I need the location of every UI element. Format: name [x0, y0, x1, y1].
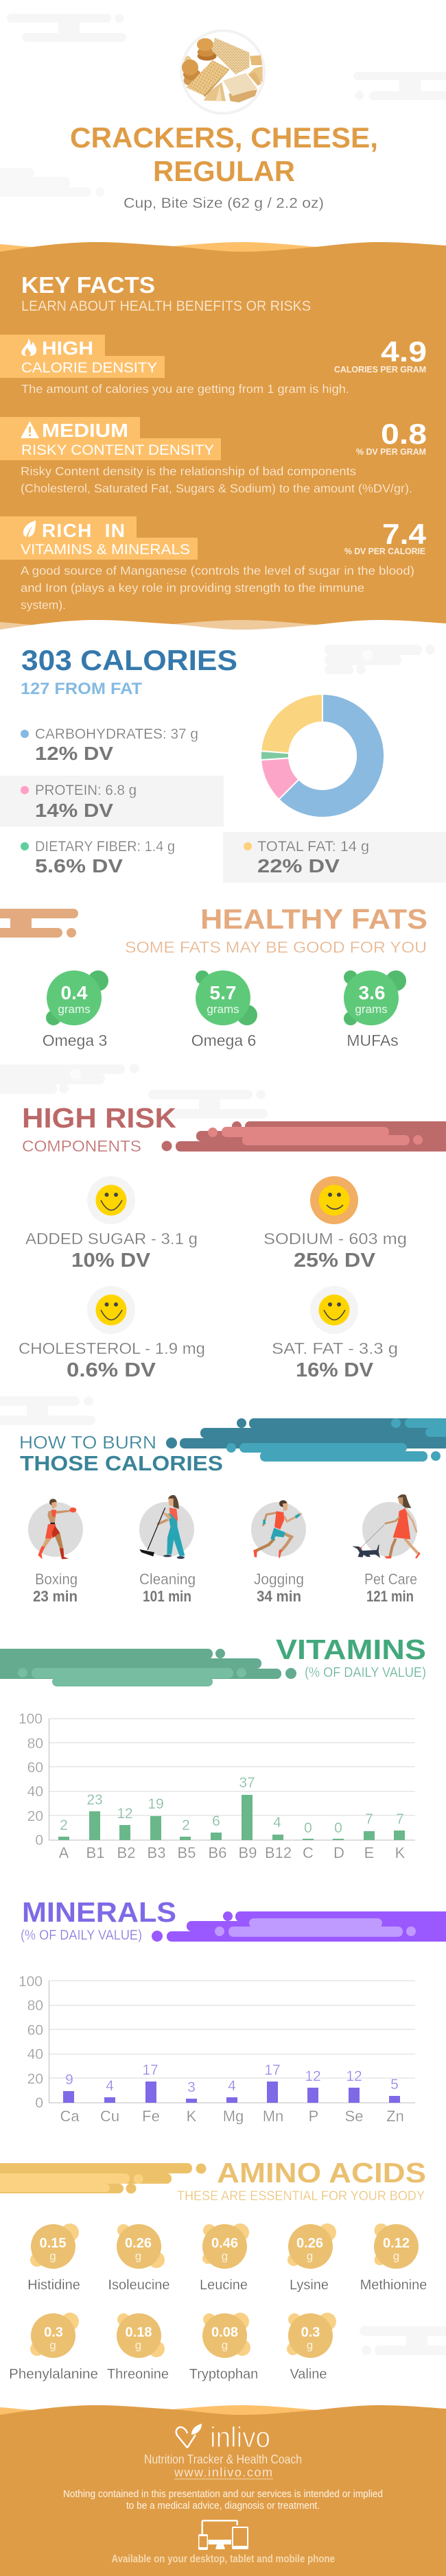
panel: how to burn those calories [19, 1418, 446, 1605]
bar chart: vitamins: 60 [27, 1760, 43, 1776]
amino: lysine: g [307, 2250, 313, 2263]
amino: threonine [107, 2313, 169, 2382]
icon: warning triangle [21, 421, 39, 438]
icon: woman walking dog [352, 1494, 421, 1558]
amino: lysine: Lysine [290, 2278, 329, 2293]
fact: medium risky content density: % DV PER GRAM [356, 446, 426, 457]
disclaimer: to be a medical advice, diagnosis or treatment. [126, 2500, 320, 2512]
minerals heading: (% OF DAILY VALUE) [21, 1928, 142, 1943]
background cloud: how to burn [0, 1396, 95, 1425]
bar chart: minerals: Zn [386, 2108, 404, 2125]
stat: omega 3: 0.4 [61, 982, 88, 1003]
burn heading: HOW TO BURN [19, 1432, 156, 1453]
icon: flame [21, 338, 36, 356]
burn heading: THOSE CALORIES [20, 1451, 223, 1475]
bar chart: vitamins: B9 [239, 1844, 257, 1861]
amino: histidine [27, 2223, 80, 2293]
activity: pet care: 121 min [366, 1588, 414, 1605]
amino: threonine: 0.18 [126, 2325, 152, 2340]
bar chart: vitamins: B12 [265, 1844, 292, 1861]
bar chart: minerals: 3 [187, 2079, 196, 2095]
amino: methionine [360, 2223, 427, 2293]
fact: rich in vitamins and minerals: RICH IN [42, 520, 125, 541]
bar chart: minerals: K [187, 2108, 197, 2125]
bar chart: vitamins: 0 [304, 1820, 312, 1836]
background cloud: top left [7, 14, 126, 42]
fact: medium risky content density: Risky Content density is the relationship of bad components [21, 464, 356, 478]
bar chart: vitamins: 2 [60, 1817, 68, 1833]
stat: omega 6: Omega 6 [191, 1031, 256, 1049]
amino: histidine: g [49, 2250, 56, 2263]
key facts heading: KEY FACTS [21, 272, 155, 298]
activity: jogging [251, 1500, 306, 1605]
bar chart: vitamins: 2 [182, 1817, 190, 1833]
fact: medium risky content density: (Cholesterol, Saturated Fat, Sugars & Sodium) to the amount (%DV/gr). [21, 481, 412, 495]
amino: lysine [287, 2223, 336, 2293]
fact: high calorie density [0, 335, 427, 396]
amino: lysine: 0.26 [296, 2236, 323, 2251]
fact: high calorie density: The amount of calories you are getting from 1 gram is high. [21, 382, 349, 396]
panel: key facts [0, 242, 446, 639]
bar chart: vitamins: 4 [273, 1815, 281, 1830]
background cloud: calories [325, 645, 435, 674]
healthy fats heading: SOME FATS MAY BE GOOD FOR YOU [125, 938, 427, 956]
activity: jogging: 34 min [257, 1588, 301, 1605]
legend: dietary fiber: 5.6% DV [35, 855, 123, 876]
bar chart: minerals: 12 [305, 2068, 321, 2084]
bar chart: vitamins: C [303, 1844, 314, 1861]
vitamins heading: VITAMINS [276, 1634, 426, 1665]
activity: cleaning: 101 min [143, 1588, 191, 1605]
bar chart: vitamins: 37 [239, 1775, 255, 1791]
bar chart: minerals: Mg [223, 2108, 244, 2125]
amino: methionine: 0.12 [383, 2236, 410, 2251]
amino: isoleucine: g [135, 2250, 141, 2263]
icon: person sweeping [139, 1495, 185, 1559]
bar chart: minerals: 4 [228, 2078, 236, 2094]
bar chart: minerals: Fe [142, 2108, 160, 2125]
stat: omega 3 [43, 970, 108, 1049]
background cloud: lower right [360, 2326, 446, 2355]
legend: protein [0, 776, 224, 826]
amino: leucine: 0.46 [211, 2236, 238, 2251]
bar chart: vitamins: 7 [365, 1811, 373, 1827]
panel: footer [0, 2405, 446, 2576]
stat: mufas: MUFAs [347, 1031, 399, 1049]
legend: protein: PROTEIN: 6.8 g [35, 783, 137, 798]
bar chart: minerals: 100 [19, 1974, 43, 1990]
bar chart: minerals: 40 [27, 2047, 43, 2062]
panel: high risk components [19, 1102, 446, 1381]
burn heading [19, 1432, 223, 1475]
fact: rich in vitamins and minerals [0, 516, 427, 612]
fact: rich in vitamins and minerals: and Iron (plays a key role in providing strength to the immune [21, 581, 364, 595]
bar chart: vitamins: D [333, 1844, 344, 1861]
fact: rich in vitamins and minerals: system). [21, 598, 66, 612]
bar chart: vitamins: 0 [35, 1833, 43, 1848]
amino: tryptophan: g [222, 2339, 228, 2352]
background cloud: centre of high risk [148, 1090, 268, 1119]
minerals heading: MINERALS [22, 1896, 176, 1928]
bar chart: minerals: Mn [263, 2108, 283, 2125]
icon: crackers photo in circle [182, 31, 264, 113]
stat: omega 6 [191, 970, 257, 1049]
vitamins heading: (% OF DAILY VALUE) [305, 1665, 426, 1680]
amino: threonine: g [135, 2339, 141, 2352]
fact: high calorie density: HIGH [42, 337, 93, 359]
icon: jogger [253, 1500, 301, 1558]
fact: rich in vitamins and minerals: VITAMINS & MINERALS [21, 542, 190, 558]
amino acids heading [177, 2157, 426, 2204]
component: saturated fat [272, 1286, 398, 1381]
amino: methionine: g [393, 2250, 399, 2263]
amino: isoleucine: Isoleucine [108, 2278, 170, 2293]
legend: carbohydrates [21, 726, 198, 764]
activity: boxing: 23 min [33, 1588, 78, 1605]
icon: devices [198, 2520, 248, 2550]
legend: carbohydrates: 12% DV [35, 743, 113, 764]
bar chart: minerals: 9 [65, 2072, 73, 2088]
panel: calories [0, 644, 446, 883]
vitamins heading [276, 1634, 426, 1680]
fact: rich in vitamins and minerals: A good source of Manganese (controls the level of sugar in the blood) [21, 564, 414, 577]
amino: phenylalanine: 0.3 [44, 2325, 63, 2340]
legend: total fat: TOTAL FAT: 14 g [257, 839, 369, 855]
bar chart: minerals: 0 [35, 2095, 43, 2111]
bar chart: vitamins: B3 [148, 1844, 165, 1861]
minerals heading [21, 1896, 176, 1943]
activity: cleaning: Cleaning [139, 1571, 196, 1588]
legend: total fat: 22% DV [257, 855, 340, 876]
amino acids heading: THESE ARE ESSENTIAL FOR YOUR BODY [177, 2189, 425, 2204]
amino: threonine: Threonine [107, 2367, 169, 2382]
legend: protein: 14% DV [35, 800, 113, 821]
stat: mufas [344, 970, 406, 1049]
component: added sugar [25, 1176, 198, 1272]
amino: valine: 0.3 [301, 2325, 320, 2340]
stat: mufas: 3.6 [359, 982, 385, 1003]
component: added sugar: ADDED SUGAR - 3.1 g [25, 1230, 198, 1248]
amino: histidine: Histidine [27, 2278, 80, 2293]
title: CRACKERS, CHEESE, [70, 121, 378, 154]
stat: omega 3: Omega 3 [43, 1031, 107, 1049]
bar chart: vitamins: 12 [117, 1806, 133, 1822]
amino: isoleucine [108, 2224, 170, 2293]
stat: omega 6: 5.7 [210, 982, 236, 1003]
bar chart: minerals: Se [345, 2108, 363, 2125]
activity: pet care: Pet Care [364, 1571, 417, 1588]
component: sodium: 25% DV [294, 1250, 376, 1272]
high risk heading: HIGH RISK [22, 1102, 176, 1134]
icon: boxer [38, 1499, 76, 1559]
bar chart: vitamins: 100 [19, 1711, 43, 1727]
calories heading: 303 CALORIES [21, 644, 237, 676]
bar chart: vitamins: 6 [212, 1813, 220, 1829]
component: cholesterol: CHOLESTEROL - 1.9 mg [19, 1339, 205, 1357]
decorative bars: minerals [152, 1911, 446, 1942]
website link: www.inlivo.com [174, 2466, 272, 2479]
availability note: Available on your desktop, tablet and mobile phone [111, 2553, 335, 2565]
component: saturated fat: SAT. FAT - 3.3 g [272, 1339, 398, 1357]
fact: medium risky content density: RISKY CONTENT DENSITY [21, 442, 214, 458]
serving size: Cup, Bite Size (62 g / 2.2 oz) [124, 195, 324, 211]
stat: omega 3: grams [58, 1003, 91, 1016]
bar chart: vitamins [19, 1711, 415, 1861]
fact: rich in vitamins and minerals: % DV PER CALORIE [344, 546, 425, 556]
disclaimer: Nothing contained in this presentation and our services is intended or implied [63, 2488, 383, 2500]
decorative bars: burn [166, 1418, 446, 1462]
fact: high calorie density: 4.9 [381, 335, 427, 368]
amino: phenylalanine: Phenylalanine [9, 2367, 98, 2382]
logo: inlivo: inlivo [210, 2421, 270, 2453]
bar chart: vitamins: B2 [117, 1844, 135, 1861]
amino: valine [287, 2313, 336, 2382]
bar chart: vitamins: 80 [27, 1736, 43, 1752]
amino: valine: Valine [290, 2367, 327, 2382]
amino: phenylalanine: g [49, 2339, 56, 2352]
background cloud: top right [353, 72, 446, 100]
bar chart: minerals: 5 [390, 2077, 399, 2092]
amino: valine: g [307, 2339, 313, 2352]
amino: methionine: Methionine [360, 2278, 427, 2293]
decorative blob: healthy fats [0, 909, 78, 938]
bar chart: minerals: Cu [100, 2108, 119, 2125]
bar chart: minerals: 80 [27, 1998, 43, 2014]
component: saturated fat: 16% DV [296, 1359, 374, 1381]
bar chart: minerals: Ca [60, 2108, 80, 2125]
healthy fats heading [125, 903, 427, 956]
activity: pet care [352, 1494, 421, 1605]
bar chart: minerals: 60 [27, 2023, 43, 2038]
background cloud: left of title [0, 168, 104, 197]
logo: inlivo [176, 2421, 270, 2453]
decorative bars: vitamins [0, 1649, 296, 1686]
fact: medium risky content density [0, 417, 427, 495]
component: added sugar: 10% DV [71, 1250, 151, 1272]
activity: cleaning [139, 1495, 196, 1605]
component: sodium [263, 1176, 407, 1272]
amino: leucine: g [222, 2250, 228, 2263]
calories heading: 127 FROM FAT [21, 680, 142, 698]
bar chart: minerals: 4 [106, 2078, 114, 2094]
key facts heading [21, 272, 311, 314]
tagline: Nutrition Tracker & Health Coach [144, 2453, 302, 2466]
fact: high calorie density: CALORIE DENSITY [21, 360, 157, 376]
bar chart: vitamins: 0 [334, 1820, 342, 1836]
amino: tryptophan [189, 2313, 258, 2382]
panel: healthy fats [0, 903, 427, 1049]
activity: boxing: Boxing [35, 1571, 78, 1588]
stat: omega 6: grams [207, 1003, 239, 1016]
decorative bars: amino acids [0, 2163, 206, 2193]
component: cholesterol [19, 1286, 205, 1381]
legend: dietary fiber [21, 839, 175, 876]
bar chart: minerals: 20 [27, 2071, 43, 2087]
high risk heading [22, 1102, 176, 1155]
bar chart: vitamins: B1 [86, 1844, 104, 1861]
legend: total fat [223, 832, 446, 883]
panel: amino acids [0, 2157, 446, 2382]
bar chart: vitamins: 7 [396, 1811, 404, 1827]
amino: phenylalanine [9, 2313, 98, 2382]
bar chart: vitamins: 23 [86, 1792, 103, 1808]
disclaimer [63, 2488, 383, 2512]
fact: high calorie density: CALORIES PER GRAM [334, 364, 426, 374]
decorative bars: high risk [162, 1121, 446, 1152]
background cloud: left of high risk [0, 1064, 139, 1094]
amino: isoleucine: 0.26 [125, 2236, 152, 2251]
calories heading [21, 644, 237, 698]
component: cholesterol: 0.6% DV [67, 1359, 156, 1381]
panel: minerals [19, 1896, 446, 2125]
amino: leucine [200, 2223, 249, 2293]
legend: carbohydrates: CARBOHYDRATES: 37 g [35, 726, 198, 742]
activity: boxing [28, 1499, 83, 1605]
icon: leaf [23, 521, 36, 537]
amino: leucine: Leucine [200, 2278, 248, 2293]
amino acids heading: AMINO ACIDS [217, 2157, 426, 2189]
bar chart: minerals: 17 [142, 2062, 159, 2078]
bar chart: vitamins: 20 [27, 1809, 43, 1824]
title: REGULAR [153, 155, 295, 187]
fact: medium risky content density: 0.8 [381, 418, 427, 450]
bar chart: vitamins: B6 [209, 1844, 226, 1861]
bar chart: vitamins: E [364, 1844, 374, 1861]
stat: mufas: grams [355, 1003, 388, 1016]
bar chart: vitamins: 19 [148, 1796, 164, 1812]
bar chart: vitamins: K [395, 1844, 406, 1861]
bar chart: vitamins: 40 [27, 1784, 43, 1800]
panel: vitamins [0, 1634, 426, 1861]
bar chart: minerals: P [309, 2108, 318, 2125]
component: sodium: SODIUM - 603 mg [263, 1230, 407, 1248]
key facts heading: LEARN ABOUT HEALTH BENEFITS OR RISKS [21, 298, 311, 314]
fact: rich in vitamins and minerals: 7.4 [382, 518, 427, 550]
fact: medium risky content density: MEDIUM [42, 420, 128, 441]
amino: tryptophan: Tryptophan [189, 2367, 258, 2382]
high risk heading: COMPONENTS [22, 1137, 141, 1155]
donut chart [261, 694, 384, 818]
bar chart: vitamins: B5 [178, 1844, 196, 1861]
legend: dietary fiber: DIETARY FIBER: 1.4 g [35, 839, 175, 855]
amino: tryptophan: 0.08 [211, 2325, 238, 2340]
bar chart: minerals [19, 1974, 415, 2125]
bar chart: minerals: 17 [264, 2062, 281, 2078]
bar chart: vitamins: A [59, 1844, 69, 1861]
bar chart: minerals: 12 [346, 2068, 362, 2084]
healthy fats heading: HEALTHY FATS [200, 903, 427, 935]
title [70, 121, 378, 187]
amino: histidine: 0.15 [40, 2236, 66, 2251]
activity: jogging: Jogging [254, 1571, 304, 1588]
